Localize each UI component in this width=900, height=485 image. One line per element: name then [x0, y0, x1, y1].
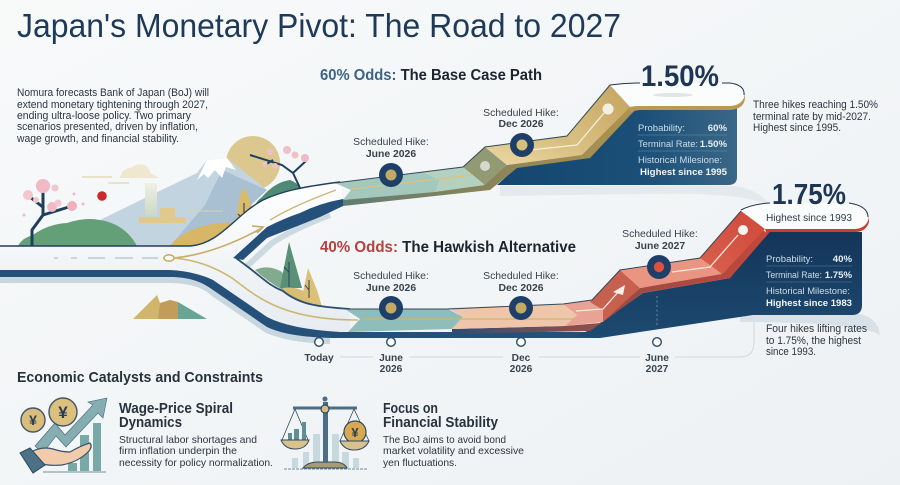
faded bars: [292, 434, 359, 468]
title: Japan's Monetary Pivot: The Road to 2027: [17, 8, 621, 45]
hike label Dec 2026 lower: Dec 2026: [498, 283, 544, 294]
timeline labels: [304, 353, 669, 375]
hike label June 2026 lower: Scheduled Hike:: [353, 271, 429, 282]
dark red segment: [590, 270, 640, 322]
landscape illustration: [18, 136, 325, 319]
road surface: [0, 182, 350, 332]
post: [323, 402, 328, 463]
upper far gold line: [270, 190, 336, 220]
hike label June 2027: June 2027: [635, 241, 685, 252]
growth arrow: [35, 398, 107, 453]
lower green hill: [255, 267, 292, 290]
upper road top edge: [0, 182, 340, 246]
mountain snow cap: [197, 158, 236, 180]
red rising section: [700, 211, 765, 274]
yen coin right: ¥: [58, 403, 68, 422]
ribbon underside: [343, 105, 636, 206]
timeline lines: [340, 322, 754, 357]
green triangle tree: [280, 242, 302, 288]
stat dividers lower: [766, 266, 852, 282]
wage-price heading: Wage-Price Spiral: [119, 401, 233, 417]
hike label Dec 2026 upper: [483, 108, 559, 130]
cap caption: Highest since 1993: [766, 213, 852, 224]
red line: [576, 235, 738, 311]
left pan: [281, 440, 309, 449]
gold rising segment upper: [567, 85, 632, 155]
beam: [293, 406, 357, 410]
navy base under upper ribbon: [497, 108, 737, 185]
stability heading: [383, 401, 498, 431]
hike label Dec 2026 lower: Scheduled Hike:: [483, 271, 559, 282]
stat box upper: Highest since 1995: [640, 167, 728, 178]
scheduled hike node June 2027: [647, 255, 671, 279]
icon: balance scale: [281, 396, 369, 469]
white cap lower: [741, 203, 868, 229]
timeline labels: Dec: [512, 353, 531, 364]
description lower: Four hikes lifting rates: [766, 323, 868, 335]
timeline: [304, 296, 754, 375]
gold tree: [237, 188, 253, 226]
hike label June 2027: Scheduled Hike:: [622, 229, 698, 240]
left green hill: [18, 219, 137, 246]
icon: golden sun: [226, 136, 280, 190]
gold hill: [170, 222, 245, 246]
wage-price heading: Dynamics: [119, 415, 182, 431]
cap outline: [610, 83, 744, 95]
node white lower: [738, 225, 748, 235]
intro text: [16, 87, 209, 145]
intro text: scenarios presented, driven by inflation,: [17, 121, 198, 133]
small mountains: [133, 295, 207, 319]
cloud and mist: [82, 177, 129, 183]
gold mound: [283, 288, 325, 308]
hike label June 2026 upper: [353, 137, 429, 160]
wage-price body: [119, 435, 273, 469]
upper branch navy edge: [233, 199, 343, 260]
salmon flat section: [620, 258, 722, 288]
stat box upper: Terminal Rate:: [638, 139, 698, 150]
description lower: [766, 323, 868, 358]
heading: 40% odds: 40% Odds: The Hawkish Alternative: [320, 239, 576, 256]
hike label June 2026 upper: June 2026: [366, 149, 416, 160]
marker ring on road: [164, 255, 174, 261]
road lower shadow: [0, 280, 330, 341]
misty waterfall: [145, 183, 157, 217]
timeline labels: June: [645, 353, 669, 364]
intro text: ending ultra-loose policy. Two primary: [17, 110, 192, 122]
upper line highlight: [530, 113, 604, 150]
stat box upper: [638, 123, 728, 178]
lower gold line: [174, 258, 358, 320]
lower branch top edge: [236, 258, 350, 309]
upper centre line: [352, 175, 473, 189]
stability heading: Financial Stability: [383, 415, 498, 431]
hike label June 2026 upper: Scheduled Hike:: [353, 137, 429, 148]
stability heading: Focus on: [383, 401, 438, 417]
intro text: Nomura forecasts Bank of Japan (BoJ) will: [17, 87, 209, 99]
top knob: [322, 396, 328, 402]
white cap: [610, 83, 744, 107]
yen coin left: ¥: [29, 412, 37, 428]
mist line: [187, 210, 223, 212]
peach segment lower: [448, 304, 577, 329]
heading: economic catalysts: Economic Catalysts and Constraints: [17, 370, 263, 386]
right pan: [340, 441, 369, 450]
icon: hand coins chart: [20, 398, 107, 473]
pale node: [480, 161, 490, 171]
cuff: [20, 448, 45, 473]
bars: [68, 423, 101, 471]
stat box lower: Historical Milestone:: [766, 286, 850, 297]
hike label Dec 2026 lower: [483, 271, 559, 294]
panel: financial stability: [281, 396, 524, 469]
scheduled hike node June 2026: [379, 163, 403, 187]
baseline dots: [284, 468, 367, 470]
stat box lower: [766, 254, 852, 309]
stat box upper: 1.50%: [700, 139, 727, 150]
stability body: yen fluctuations.: [383, 458, 457, 469]
hike label Dec 2026 upper: Scheduled Hike:: [483, 108, 559, 119]
description lower: since 1993.: [766, 346, 816, 358]
upper gold arrow: [174, 226, 263, 258]
lower ribbon top outline: [345, 211, 741, 309]
stat box upper: Probability:: [638, 123, 685, 134]
stability body: [383, 435, 524, 469]
stability body: market volatility and excessive: [383, 446, 524, 457]
pivot: [321, 405, 329, 413]
panel: wage-price spiral: [20, 398, 273, 473]
icon: red sun: [97, 191, 107, 201]
lower centre line: [362, 318, 576, 320]
main navy edge: [0, 270, 600, 338]
description upper: Highest since 1995.: [753, 122, 841, 134]
description lower: to 1.75%, the highest: [766, 335, 861, 347]
node ring: [602, 104, 614, 114]
stat box upper: 60%: [708, 123, 727, 134]
gold segment upper: [485, 136, 582, 165]
icon: cherry tree right: [250, 146, 309, 188]
cloud: [120, 164, 159, 178]
lower cap outline: [741, 203, 868, 217]
right green hill: [252, 180, 300, 218]
navy base under lower ribbon: [575, 232, 862, 338]
lower ribbon underside: [452, 230, 768, 334]
description upper: Three hikes reaching 1.50%: [753, 99, 878, 111]
scheduled hike node Dec 2026 lower: [509, 296, 533, 320]
description upper: terminal rate by mid-2027.: [753, 111, 871, 123]
icon: mountain: [100, 158, 267, 246]
gold tree trunk: [238, 203, 250, 228]
hike label June 2027: [622, 229, 698, 252]
stat dividers: [638, 135, 727, 151]
tree trunks: [284, 262, 309, 298]
road dashes: [54, 257, 158, 259]
teal segment upper two: [423, 167, 485, 192]
panel: base case path: [320, 60, 878, 206]
big value 1.50%: 1.50%: [641, 60, 719, 93]
heading: 60% odds: 60% Odds: The Base Case Path: [320, 67, 542, 84]
timeline labels: 2026: [510, 364, 533, 375]
pan strings: [282, 409, 369, 441]
yen coin: ¥: [351, 425, 359, 440]
cap shadow: [653, 93, 693, 97]
gold cap underside: [628, 92, 745, 113]
intro text: wage growth, and financial stability.: [16, 133, 179, 145]
upper ribbon top outline: [335, 85, 610, 183]
upper branch light edge: [245, 215, 330, 268]
description upper: [753, 99, 878, 134]
panel: hawkish alternative: [320, 179, 880, 358]
timeline labels: 2026: [380, 364, 403, 375]
road network: [0, 182, 600, 341]
gold small tree: [302, 268, 322, 307]
dotted drop line: [656, 296, 658, 327]
soft shadow beneath base: [740, 314, 880, 335]
wage-price body: firm inflation underpin the: [119, 446, 237, 457]
stat box lower: Terminal Rate:: [766, 270, 822, 281]
big value 1.75%: 1.75%: [772, 179, 846, 211]
pink segment lower: [563, 300, 604, 326]
stat box lower: Probability:: [766, 254, 813, 265]
timeline labels: Today: [304, 353, 334, 364]
teal segment lower: [345, 309, 463, 332]
teal segment upper: [335, 172, 440, 200]
wage-price heading: [119, 401, 233, 431]
mist bars: [139, 208, 186, 223]
wage-price body: Structural labor shortages and: [119, 435, 257, 446]
stability body: The BoJ aims to avoid bond: [383, 435, 506, 446]
left pan bars: [288, 422, 306, 440]
stat box lower: Highest since 1983: [766, 298, 852, 309]
hike label June 2026 lower: [353, 271, 429, 294]
intro text: extend monetary tightening through 2027,: [17, 99, 208, 111]
hike label June 2026 lower: June 2026: [366, 283, 416, 294]
timeline labels: 2027: [646, 364, 669, 375]
wage-price body: necessity for policy normalization.: [119, 458, 273, 469]
scheduled hike node June 2026 lower: [379, 296, 403, 320]
hike label Dec 2026 upper: Dec 2026: [498, 119, 544, 130]
stat box lower: 40%: [833, 254, 852, 265]
mountain shaded side: [170, 170, 267, 246]
red cap underside: [765, 216, 869, 235]
hand: [31, 443, 91, 465]
baseline: [43, 471, 106, 473]
timeline markers: [315, 338, 661, 346]
scheduled hike node Dec 2026: [510, 133, 534, 157]
soft shadow under upper base: [500, 186, 770, 205]
icon: cherry tree left: [22, 179, 84, 246]
timeline labels: June: [379, 353, 403, 364]
arrowhead: [613, 285, 625, 295]
olive segment upper: [463, 147, 507, 185]
base: [303, 462, 347, 468]
stat box upper: Historical Milesione:: [638, 155, 722, 166]
stat box lower: 1.75%: [825, 270, 852, 281]
